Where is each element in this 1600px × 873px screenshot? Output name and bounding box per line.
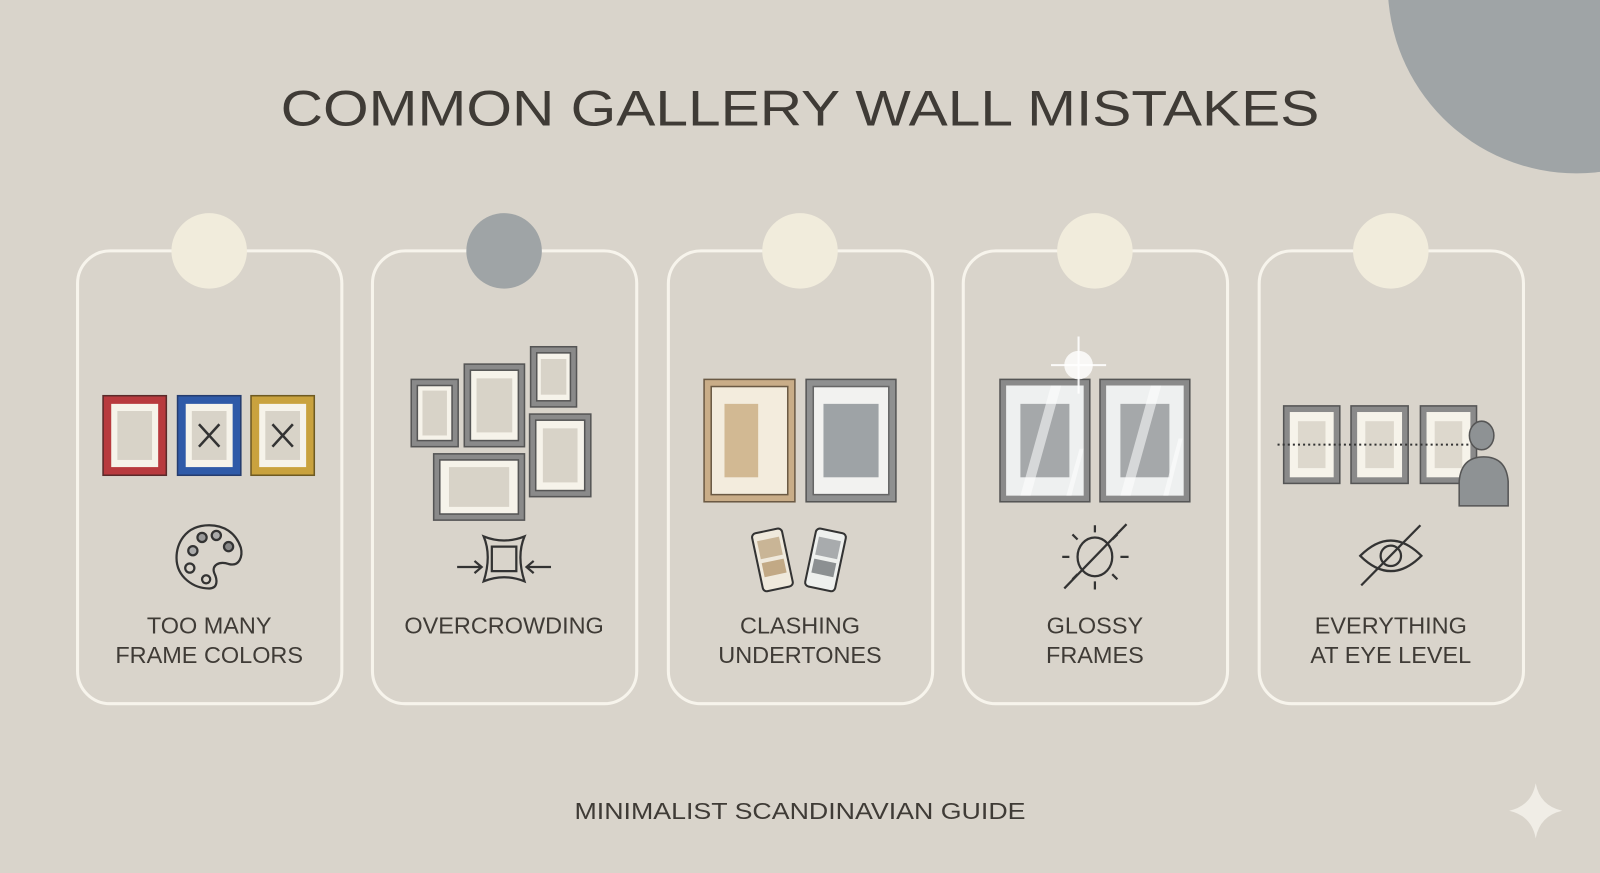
icon: compress xyxy=(457,536,551,581)
footer: MINIMALIST SCANDINAVIAN GUIDE xyxy=(574,798,1026,824)
panel: overcrowding xyxy=(372,213,637,704)
panel: everything at eye level xyxy=(1259,213,1523,704)
decorative corner circle xyxy=(1388,0,1600,173)
crowded frames xyxy=(411,347,591,520)
panel: glossy frames: FRAMES xyxy=(1046,642,1144,668)
frames: red blue gold xyxy=(103,396,314,475)
icon: palette xyxy=(177,525,241,588)
panel: glossy frames xyxy=(963,213,1228,704)
label: EVERYTHING xyxy=(1315,612,1467,638)
panel: clashing undertones: UNDERTONES xyxy=(718,642,882,668)
glossy frames with glare xyxy=(1000,337,1190,502)
label: GLOSSY xyxy=(1047,612,1143,638)
icon: sun crossed xyxy=(1062,524,1129,589)
warm and cool frames xyxy=(704,379,896,502)
icon: sparkle xyxy=(1509,783,1562,838)
panel: clashing undertones xyxy=(668,213,933,704)
label: OVERCROWDING xyxy=(404,612,604,638)
row of frames with viewer xyxy=(1278,406,1508,506)
label: TOO MANY xyxy=(147,612,272,638)
panel: everything at eye level: AT EYE LEVEL xyxy=(1310,642,1471,668)
icon: swatches xyxy=(751,528,847,592)
panel: too many frame colors xyxy=(78,213,342,704)
panel: too many frame colors: FRAME COLORS xyxy=(115,642,303,668)
icon: eye crossed xyxy=(1360,525,1421,585)
label: CLASHING xyxy=(740,612,860,638)
title: COMMON GALLERY WALL MISTAKES xyxy=(281,80,1319,136)
